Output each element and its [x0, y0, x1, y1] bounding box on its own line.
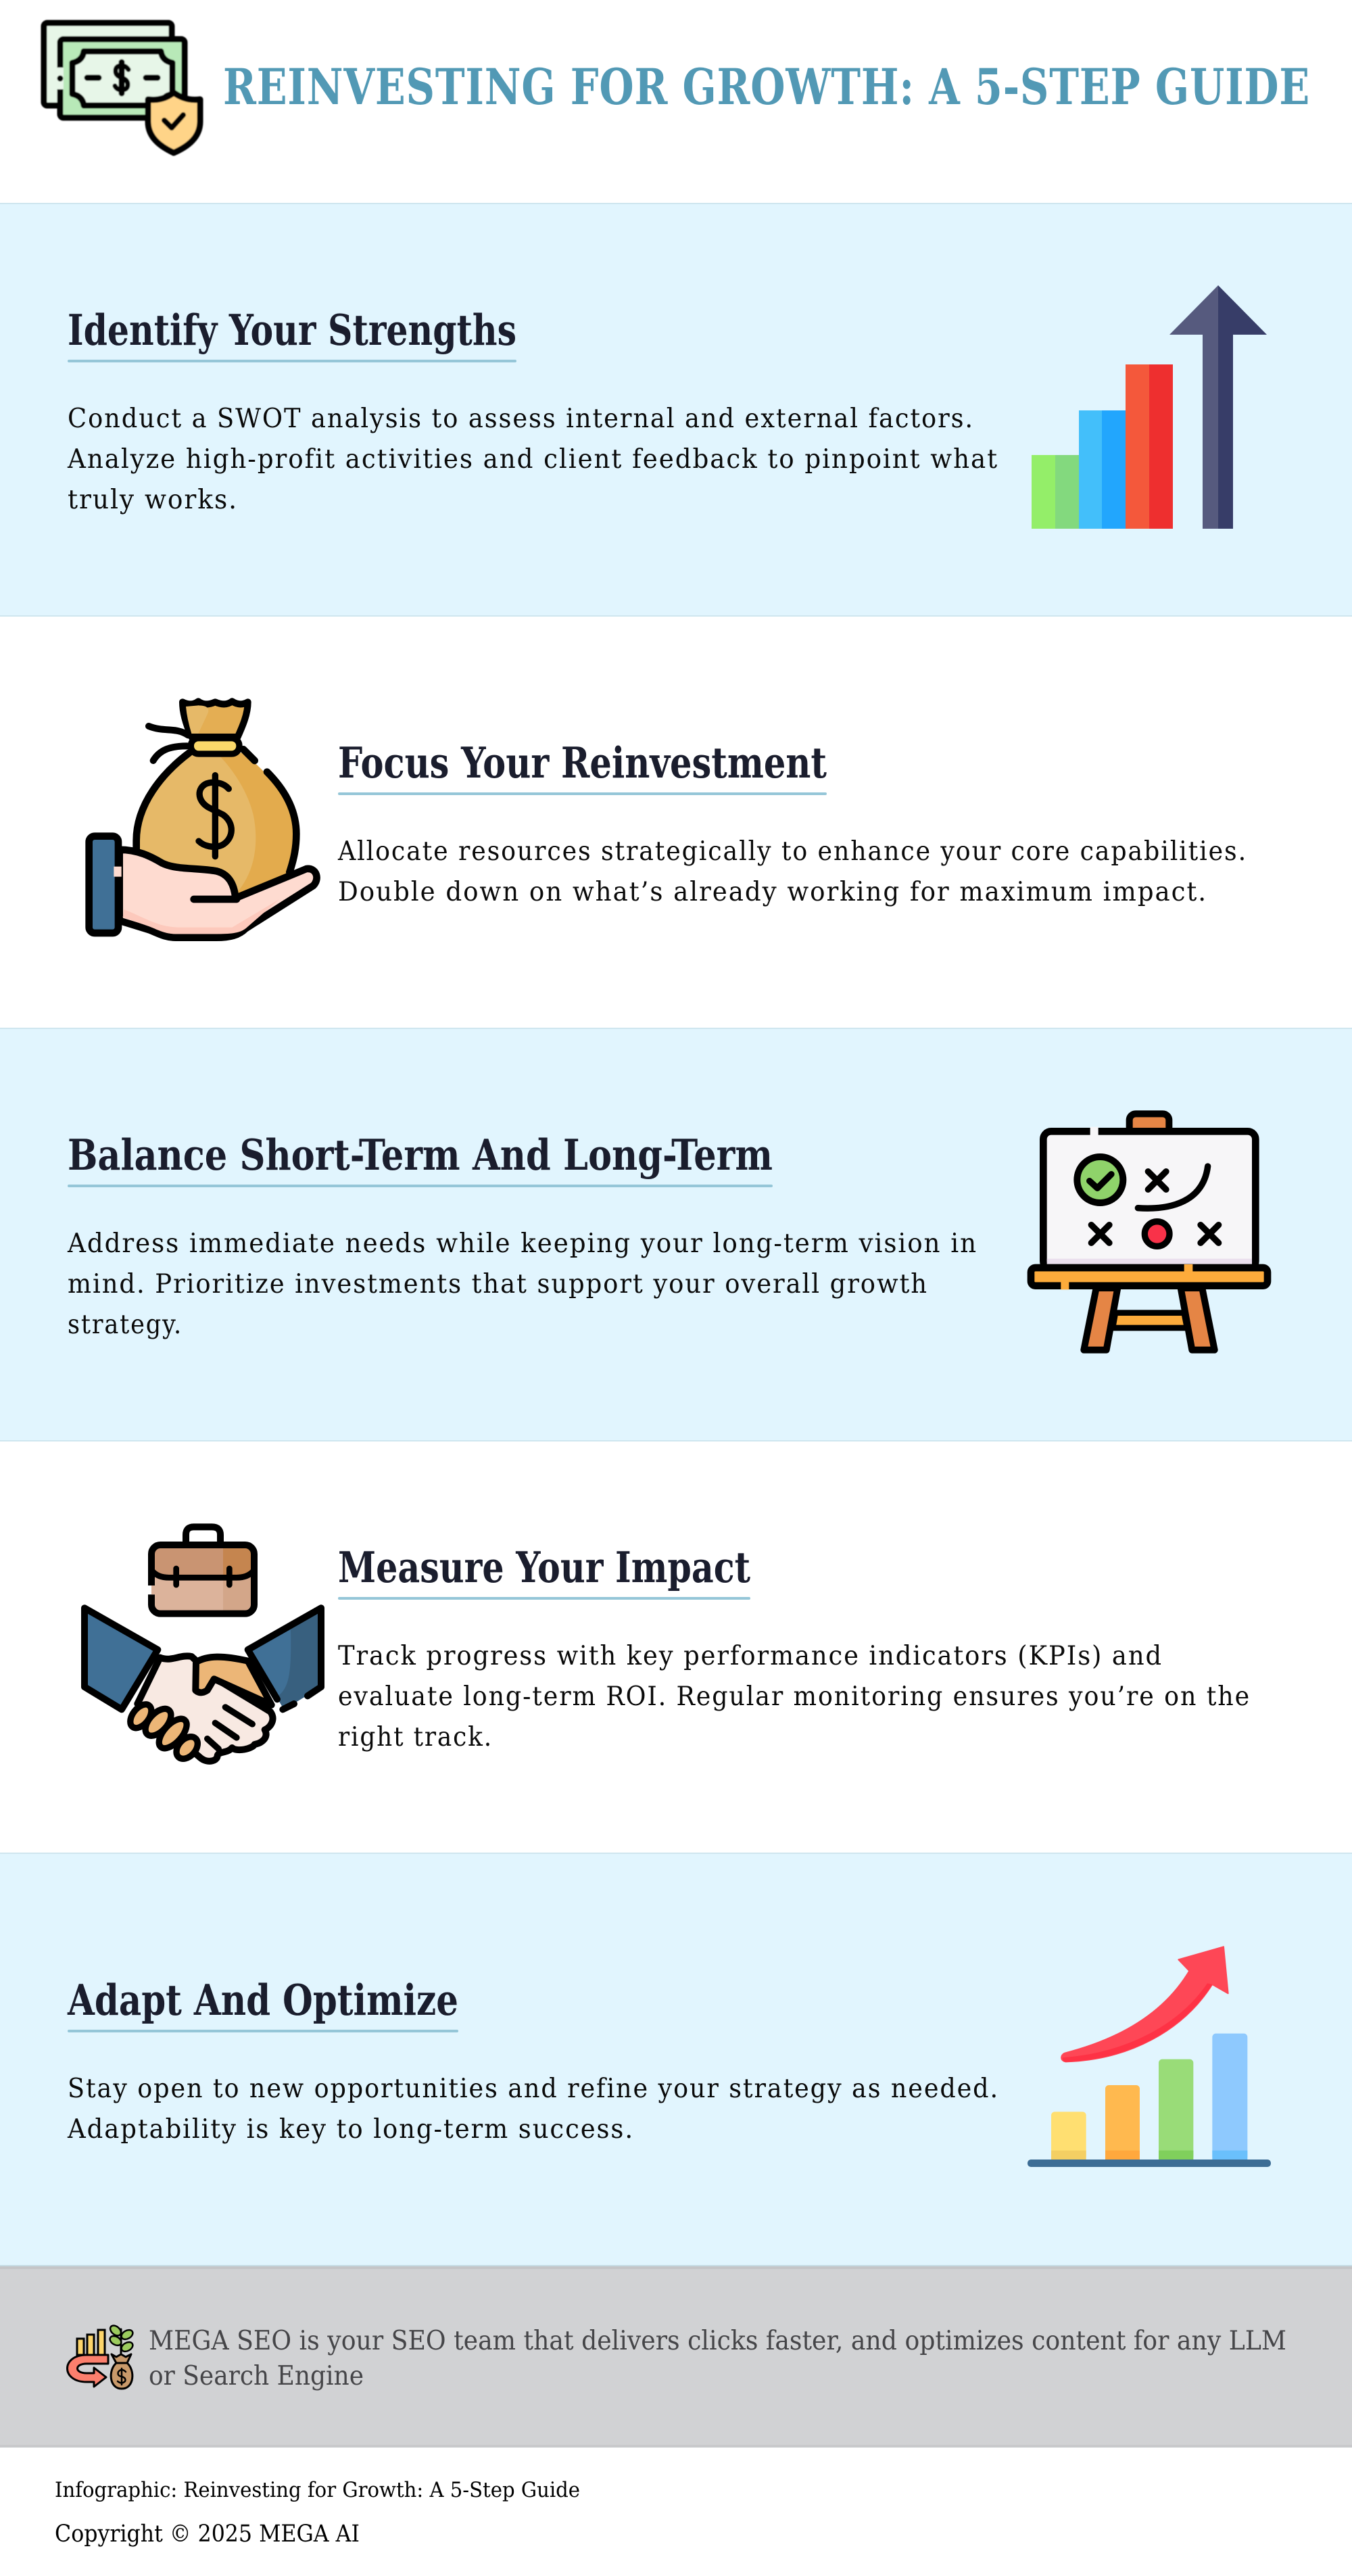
header — [44, 23, 1310, 153]
text: step 3 body: Address immediate needs while keeping your long-term vision in — [67, 1229, 977, 1259]
heading: step 3: Balance Short-Term And Long-Term — [68, 1130, 773, 1180]
panel: mega seo callout — [0, 2265, 1352, 2448]
text: step 2 body: Double down on what’s already working for maximum impact. — [338, 877, 1207, 907]
icon: seo magnet and money bag — [68, 2324, 135, 2389]
text: step 1 body: truly works. — [68, 485, 238, 515]
icon: banknotes with shield — [44, 23, 200, 153]
text: step 1 body: Conduct a SWOT analysis to assess internal and external factors. — [68, 404, 974, 434]
text: step 3 body: strategy. — [68, 1310, 183, 1340]
text: step 2 body — [337, 836, 1247, 907]
text: mega seo description — [149, 2326, 1286, 2391]
text: step 1 body — [67, 404, 998, 515]
text: step 5 body — [67, 2074, 999, 2145]
panel: step 5 adapt and optimize — [0, 1853, 1352, 2265]
text: mega seo description: or Search Engine — [149, 2361, 364, 2391]
heading: step 1: Identify Your Strengths — [68, 305, 516, 355]
footer: Copyright © 2025 MEGA AI — [55, 2521, 360, 2548]
text: step 1 body: Analyze high-profit activities and client feedback to pinpoint what — [67, 444, 998, 475]
text: mega seo description: MEGA SEO is your SEO team that delivers clicks faster, and optimizes content for any LLM — [149, 2326, 1286, 2356]
text: step 3 body — [67, 1229, 977, 1340]
panel: step 4 measure your impact — [0, 1440, 1352, 1853]
text: step 4 body — [338, 1641, 1251, 1752]
text: step 2 body: Allocate resources strategically to enhance your core capabilities. — [337, 836, 1247, 867]
text: step 5 body: Stay open to new opportunities and refine your strategy as needed. — [68, 2074, 999, 2104]
icon: strategy board on easel — [1031, 1114, 1268, 1350]
panel: step 3 balance short-term and long-term — [0, 1028, 1352, 1440]
text: step 4 body: Track progress with key performance indicators (KPIs) and — [338, 1641, 1163, 1671]
panel: step 1 identify your strengths — [0, 203, 1352, 615]
icon: growth chart with red arrow — [1028, 1947, 1271, 2167]
text: step 4 body: evaluate long-term ROI. Regular monitoring ensures you’re on the — [338, 1681, 1251, 1712]
text: step 4 body: right track. — [338, 1722, 493, 1752]
panel: step 2 focus your reinvestment — [0, 615, 1352, 1028]
text: step 3 body: mind. Prioritize investments that support your overall growth — [68, 1269, 928, 1299]
icon: rising bars and arrow — [1032, 285, 1267, 529]
text: step 5 body: Adaptability is key to long-term success. — [67, 2114, 634, 2145]
icon: hand holding money bag — [89, 701, 317, 938]
footer: Infographic: Reinvesting for Growth: A 5-Step Guide — [55, 2478, 580, 2502]
heading: step 2: Focus Your Reinvestment — [338, 738, 827, 788]
heading: step 5: Adapt And Optimize — [67, 1975, 458, 2025]
heading: step 4: Measure Your Impact — [338, 1542, 750, 1592]
icon: handshake and briefcase — [84, 1527, 321, 1763]
footer — [55, 2478, 580, 2548]
